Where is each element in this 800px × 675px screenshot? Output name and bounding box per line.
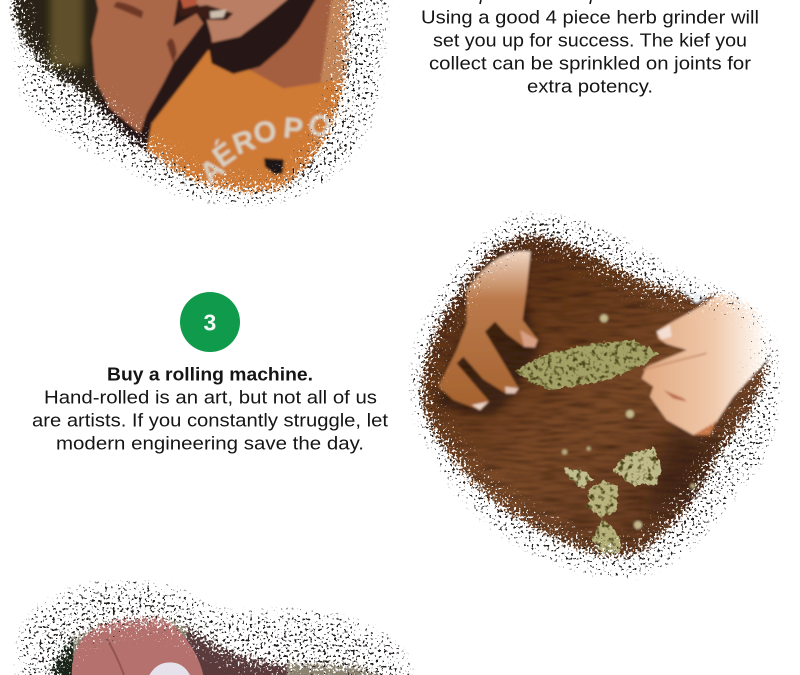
image: wooden board with hands and buds <box>416 230 772 562</box>
descender marks from cropped line above text <box>480 0 591 4</box>
photo: man rolling joint to lips <box>0 0 400 215</box>
right hand <box>642 283 770 435</box>
splatter: dark specks around top photo <box>0 0 400 215</box>
text block: step 2 description <box>421 6 759 96</box>
text block: step 2 description: extra potency. <box>527 76 653 96</box>
image: thumb with nail <box>44 613 380 675</box>
herb: ground strip and buds <box>515 340 662 555</box>
dark wood shading <box>647 423 720 520</box>
text block: step 2 description: collect can be sprinkled on joints for <box>429 52 751 74</box>
body: step 3 description: are artists. If you constantly struggle, let <box>32 410 388 430</box>
image: man with orange shirt <box>10 0 363 207</box>
step badge: 3 <box>180 292 240 352</box>
text block: step 3 <box>32 364 388 454</box>
shadow under left hand <box>437 253 540 417</box>
text block: step 2 description: Using a good 4 piece herb grinder will <box>421 6 759 28</box>
heading: buy a rolling machine: Buy a rolling machine. <box>107 364 313 384</box>
splatter: dark specks around board photo <box>407 209 783 580</box>
splatter: dark specks around bottom photo <box>0 580 420 675</box>
photo: hands rolling on wooden board <box>407 209 783 580</box>
body: step 3 description <box>32 386 388 454</box>
photo: thumb and fingers at bottom <box>0 580 427 675</box>
text block: step 2 description: set you up for success. The kief you <box>433 30 747 50</box>
body: step 3 description: modern engineering save the day. <box>56 432 364 454</box>
left hand <box>438 251 538 410</box>
text on shirt: AÉROPO <box>193 107 336 190</box>
step badge: 3: 3 <box>204 310 216 336</box>
body: step 3 description: Hand-rolled is an art, but not all of us <box>44 386 377 408</box>
